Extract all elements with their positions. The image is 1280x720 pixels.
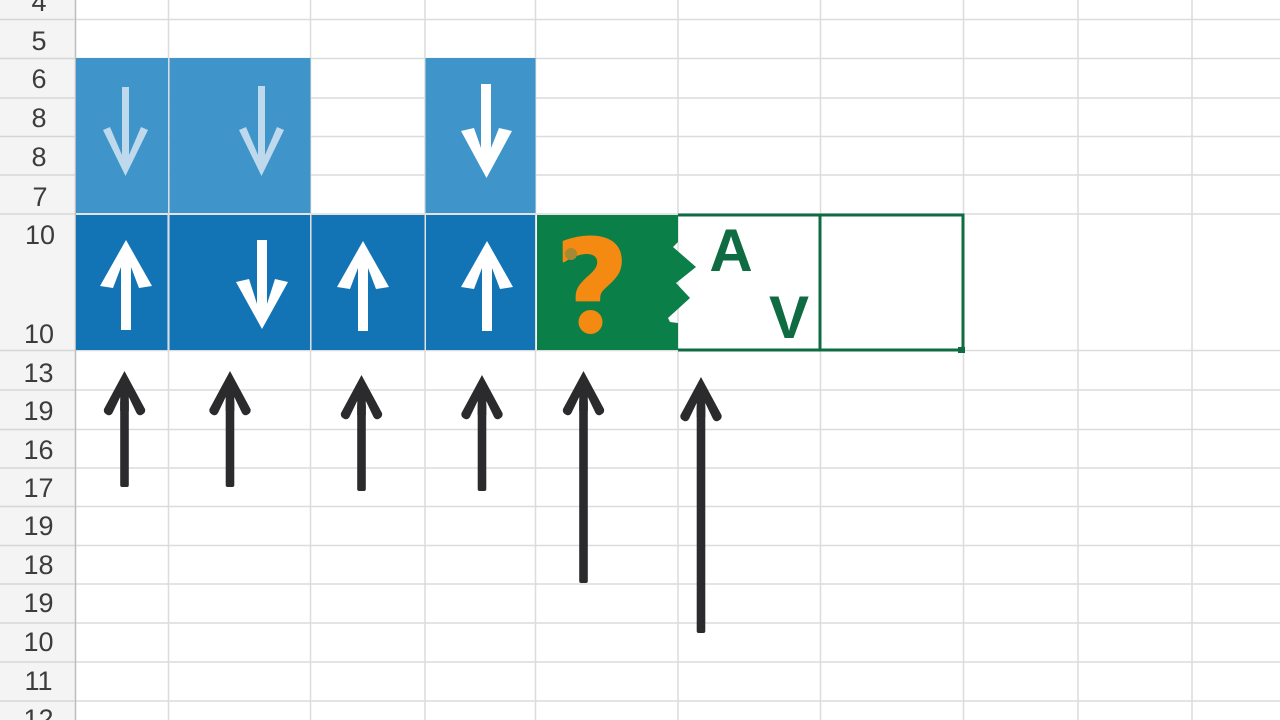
- green cell with jagged edge: [537, 215, 696, 350]
- row header column: 19: [23, 588, 54, 618]
- row header column: 10: [23, 627, 54, 657]
- dark blue cell column 4: [426, 215, 535, 350]
- icon: black up arrow 2: [209, 371, 251, 487]
- row header column: 10: [25, 220, 55, 250]
- icon: white down arrow column 2: [236, 240, 288, 329]
- row header column: 8: [31, 142, 47, 172]
- dark blue cell column 2: [170, 215, 310, 350]
- icon: white down arrow column 4: [461, 84, 512, 178]
- row header column: 19: [23, 396, 54, 426]
- icon: black up arrow 6: [680, 377, 722, 633]
- letter V: V: [769, 284, 809, 351]
- dark blue cell column 1: [76, 215, 168, 350]
- icon: white up arrow column 1: [100, 240, 152, 330]
- icon: orange question mark: [562, 236, 622, 334]
- icon: pale down arrow column 2: [239, 86, 284, 176]
- row header column: 13: [23, 358, 54, 388]
- row header column: 8: [31, 103, 47, 133]
- icon: pale down arrow column 1: [103, 87, 148, 176]
- selected cell outline: [678, 215, 965, 353]
- dark blue cell column 3: [312, 215, 424, 350]
- icon: black up arrow 1: [104, 371, 145, 487]
- light blue cell column 4: [426, 58, 536, 213]
- row header column: [0, 0, 76, 720]
- row header column: 18: [23, 550, 54, 580]
- row header column: 11: [24, 666, 53, 696]
- row header column: 6: [31, 64, 47, 94]
- row header column: 10: [24, 319, 54, 349]
- light blue cell column 2: [170, 58, 310, 213]
- icon: orange question mark: ?: [555, 214, 629, 363]
- icon: white up arrow column 3: [337, 241, 389, 331]
- icon: black up arrow 4: [461, 375, 503, 491]
- row header column: 16: [23, 435, 54, 465]
- light blue cell column 1: [76, 58, 168, 213]
- row header column: 7: [32, 182, 48, 212]
- icon: black up arrow 3: [341, 375, 382, 491]
- row header column: 19: [23, 511, 54, 541]
- icon: black up arrow 5: [563, 371, 604, 583]
- letter A: A: [709, 217, 753, 284]
- icon: white up arrow column 4: [461, 241, 513, 331]
- row header column: 5: [31, 26, 47, 56]
- row header column: 17: [23, 473, 54, 503]
